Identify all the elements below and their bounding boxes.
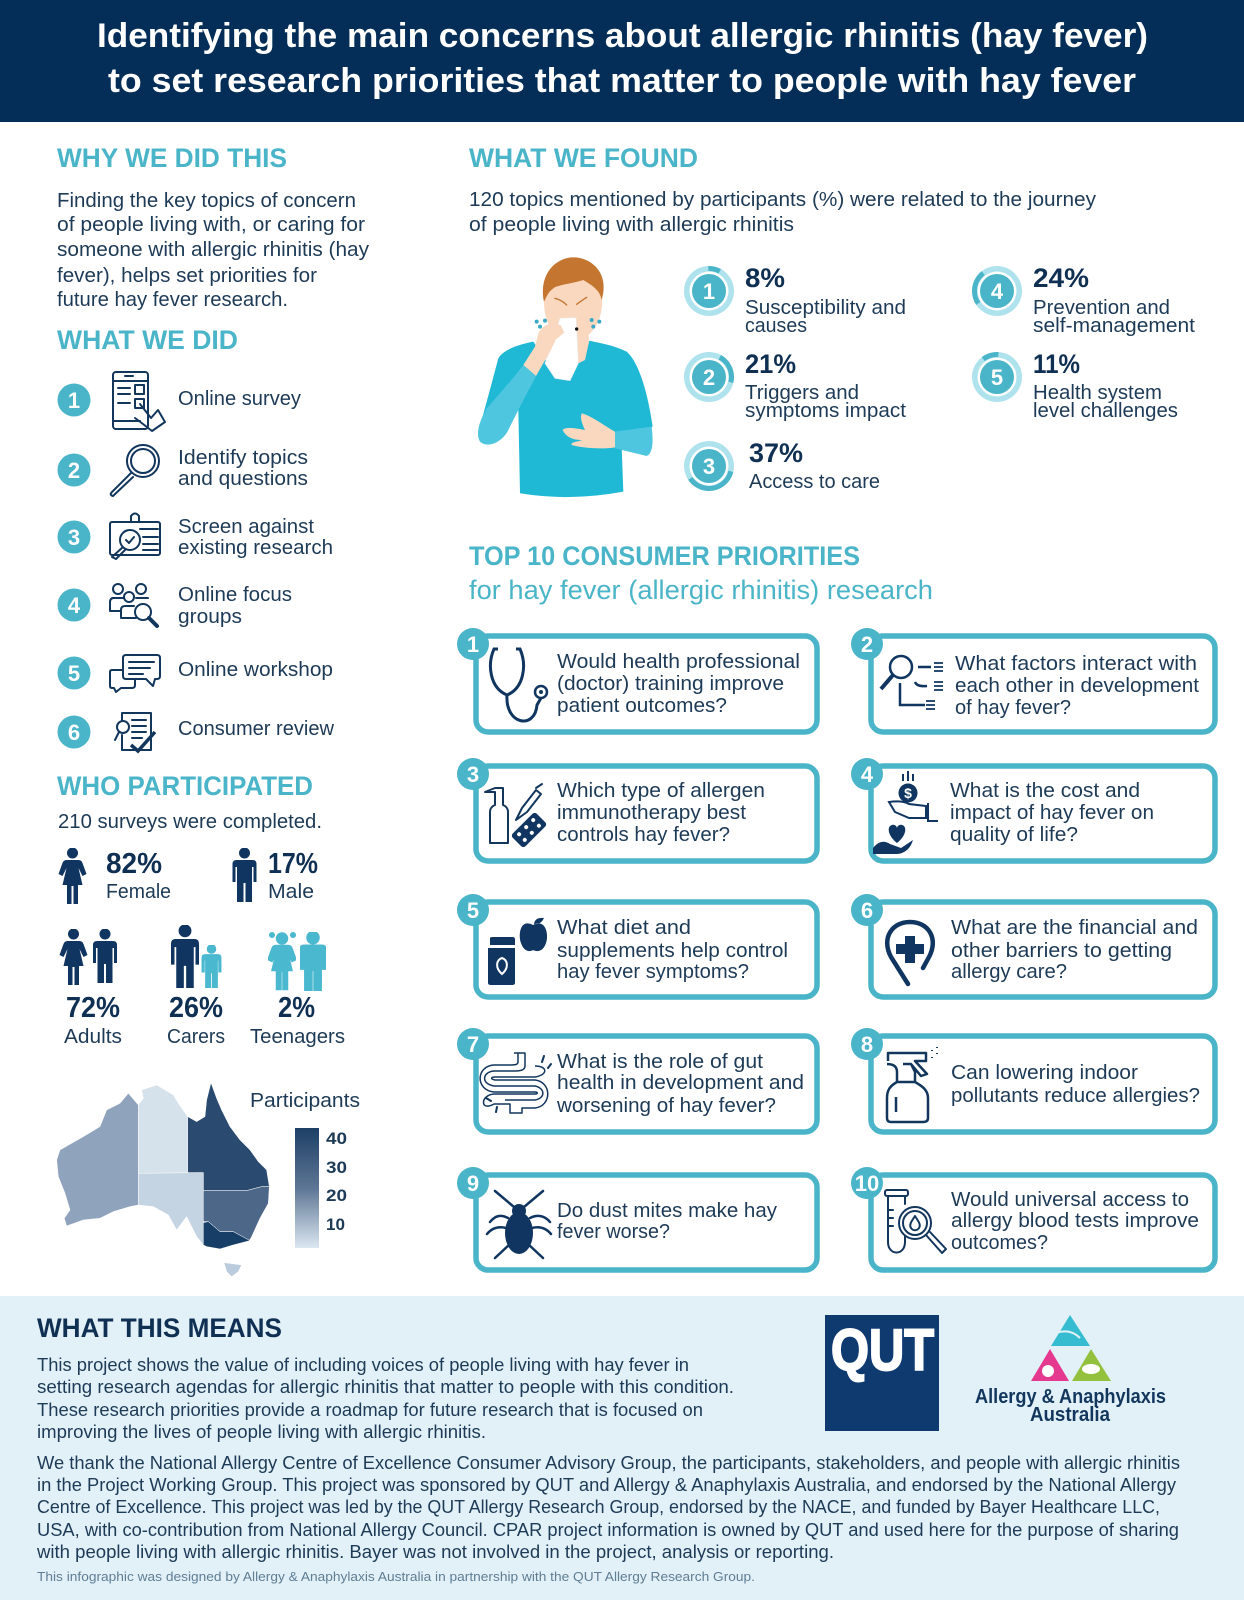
panel: priority 6: 6	[861, 898, 873, 923]
stat: female	[58, 848, 171, 904]
chart: journey topic percentages	[684, 263, 1195, 493]
panel: priority 2	[851, 628, 1215, 732]
panel: priority 1	[457, 628, 817, 732]
text block: what we found: 120 topics mentioned by participants (%) were related to the journey	[469, 189, 1096, 211]
heading: top 10 consumer priorities	[469, 541, 933, 605]
panel: priority 1: patient outcomes?	[557, 694, 727, 717]
topic 3: Access to care	[749, 471, 880, 493]
text block: acknowledgements: We thank the National Allergy Centre of Excellence Consumer Advisory Group, the participants, stakeholders, and people with allergic rhinitis	[37, 1453, 1180, 1473]
text block: why we did this: future hay fever research.	[57, 289, 288, 311]
panel: priority 10: Would universal access to	[951, 1188, 1189, 1211]
topic 5: level challenges	[1033, 400, 1178, 422]
panel: priority 9: Do dust mites make hay	[557, 1199, 778, 1222]
step 1: online survey: Online survey	[178, 388, 301, 410]
panel: priority 9: 9	[467, 1171, 479, 1196]
topic 3: 37%	[749, 438, 803, 468]
text block: acknowledgements: Centre of Excellence. This project was led by the QUT Allergy Research Group, endorsed by the NACE, and funded by Bayer Healthcare LLC,	[37, 1497, 1160, 1517]
stat: teenagers: Teenagers	[250, 1026, 345, 1048]
map legend: participants	[250, 1090, 360, 1248]
step 5: online workshop	[58, 655, 333, 692]
heading: what this means: WHAT THIS MEANS	[37, 1313, 282, 1343]
topic 1	[684, 263, 906, 337]
topic 4: Prevention and	[1033, 297, 1170, 319]
step 4: focus groups: Online focus	[178, 584, 292, 606]
text block: implications: These research priorities provide a roadmap for future research that is focused on	[37, 1400, 703, 1420]
panel: priority 4	[851, 758, 1215, 861]
map legend: participants: 40	[326, 1129, 347, 1148]
step 4: focus groups: groups	[178, 606, 242, 628]
topic 1: causes	[745, 315, 807, 337]
panel: priority 9	[457, 1167, 817, 1270]
topic 4: 4	[991, 279, 1004, 304]
panel: priority 1: 1	[467, 632, 479, 657]
panel: priority 3: 3	[467, 762, 479, 787]
panel: priority 4: $	[904, 785, 912, 801]
step 5: online workshop: Online workshop	[178, 659, 333, 681]
panel: priority 7	[457, 1028, 817, 1132]
panel: priority 7: worsening of hay fever?	[556, 1094, 776, 1117]
text block: acknowledgements	[36, 1453, 1180, 1562]
panel: priority 8: Can lowering indoor	[951, 1061, 1138, 1084]
step 6: consumer review: Consumer review	[178, 718, 335, 740]
panel: priority 4: impact of hay fever on	[950, 801, 1154, 824]
map legend: participants: Participants	[250, 1090, 360, 1112]
heading: top 10 consumer priorities: for hay fever (allergic rhinitis) research	[469, 575, 933, 605]
stat: teenagers	[250, 932, 345, 1048]
topic 5	[972, 349, 1178, 422]
text block: implications: setting research agendas for allergic rhinitis that matter to people with this condition.	[37, 1377, 734, 1397]
title banner	[0, 0, 1244, 122]
text block: acknowledgements: USA, with co-contribution from National Allergy Council. CPAR project information is owned by QUT and used here for the purpose of sharing	[37, 1520, 1179, 1540]
map legend: participants: 10	[326, 1215, 345, 1234]
topic 4: self-management	[1033, 315, 1195, 337]
panel: priority 5: 5	[467, 898, 479, 923]
panel: priority 3	[457, 758, 817, 861]
panel: priority 10: outcomes?	[951, 1231, 1048, 1254]
panel: priority 3: Which type of allergen	[557, 779, 765, 802]
stat: female: 82%	[106, 848, 162, 880]
text block: why we did this	[57, 190, 369, 311]
heading: who participated: WHO PARTICIPATED	[57, 771, 313, 801]
text: surveys completed: 210 surveys were completed.	[58, 811, 322, 833]
logo: QUT: QUT	[831, 1318, 934, 1383]
stat: female: Female	[106, 881, 171, 903]
panel: priority 2: What factors interact with	[955, 652, 1197, 675]
logo: Allergy & Anaphylaxis Australia	[975, 1315, 1166, 1426]
topic 5: 5	[991, 365, 1003, 390]
stat: male: 17%	[268, 848, 318, 880]
panel: priority 7: 7	[467, 1032, 479, 1057]
text block: why we did this: someone with allergic rhinitis (hay	[57, 239, 369, 261]
panel: priority 8	[851, 1028, 1215, 1132]
stat: teenagers: 2%	[278, 992, 315, 1024]
panel: priority 6: What are the financial and	[951, 916, 1198, 939]
step 4: focus groups: 4	[68, 593, 81, 618]
step 3: screen against research: Screen against	[178, 516, 314, 538]
text block: implications	[37, 1355, 734, 1442]
text block: why we did this: Finding the key topics of concern	[57, 190, 356, 212]
title banner: to set research priorities that matter to people with hay fever	[108, 62, 1136, 100]
logo: QUT	[825, 1315, 939, 1431]
step 2: identify topics: and questions	[178, 468, 308, 490]
logo: Allergy & Anaphylaxis Australia: Allergy & Anaphylaxis	[975, 1386, 1166, 1408]
text block: why we did this: fever), helps set priorities for	[57, 265, 317, 287]
map: participants by state	[57, 1083, 269, 1277]
panel: priority 5: hay fever symptoms?	[557, 960, 749, 983]
text block: implications: improving the lives of people living with allergic rhinitis.	[37, 1422, 486, 1442]
topic 1: Susceptibility and	[745, 297, 906, 319]
panel: priority 10: allergy blood tests improve	[951, 1209, 1199, 1232]
topic 4: 24%	[1033, 263, 1089, 293]
stat: male	[232, 848, 318, 903]
stat: adults: Adults	[64, 1026, 122, 1048]
panel: priority 7: What is the role of gut	[557, 1050, 763, 1073]
illustration: person sneezing into tissue	[478, 257, 653, 497]
panel: what we did steps	[58, 372, 335, 751]
step 6: consumer review: 6	[68, 720, 80, 745]
topic 2: Triggers and	[745, 382, 859, 404]
step 6: consumer review	[58, 713, 335, 751]
topic 1: 1	[703, 279, 715, 304]
panel: what this means	[0, 1296, 1244, 1600]
topic 3	[684, 438, 880, 493]
heading: what we found: WHAT WE FOUND	[469, 143, 698, 173]
text block: what we found	[469, 189, 1096, 236]
panel: priority 7: health in development and	[557, 1071, 804, 1094]
panel: priority 5: What diet and	[557, 916, 691, 939]
text block: acknowledgements: in the Project Working Group. This project was sponsored by QUT and Allergy & Anaphylaxis Australia, and endorsed by the National Allergy	[37, 1475, 1176, 1495]
panel: priority 5: supplements help control	[557, 939, 788, 962]
title banner: Identifying the main concerns about allergic rhinitis (hay fever)	[97, 17, 1148, 55]
step 2: identify topics: 2	[68, 458, 80, 483]
stat: male: Male	[268, 881, 314, 903]
panel: priority 4: 4	[861, 762, 874, 787]
footer credit: This infographic was designed by Allergy & Anaphylaxis Australia in partnership with the QUT Allergy Research Group.	[37, 1569, 755, 1584]
topic 2: 21%	[745, 349, 796, 379]
topic 1: 8%	[745, 263, 785, 293]
stat: carers: 26%	[169, 992, 223, 1024]
panel: priority 1: (doctor) training improve	[557, 672, 784, 695]
text block: why we did this: of people living with, or caring for	[57, 214, 365, 236]
step 5: online workshop: 5	[68, 661, 80, 686]
text block: acknowledgements: with people living with allergic rhinitis. Bayer was not involved in the project, analysis or reporting.	[36, 1542, 834, 1562]
step 2: identify topics	[58, 445, 308, 496]
step 2: identify topics: Identify topics	[178, 447, 308, 469]
heading: why we did this: WHY WE DID THIS	[57, 143, 287, 173]
heading: what we did: WHAT WE DID	[57, 325, 238, 355]
stat: carers: Carers	[167, 1026, 225, 1048]
panel: priority 10	[851, 1167, 1215, 1270]
panel: priority 9: fever worse?	[557, 1220, 670, 1243]
stat: adults: 72%	[66, 992, 120, 1024]
panel: priority 8: pollutants reduce allergies?	[951, 1084, 1200, 1107]
panel: priority 6	[851, 894, 1215, 997]
panel: priority 4: What is the cost and	[950, 779, 1140, 802]
panel: priority 6: allergy care?	[951, 960, 1067, 983]
stat: carers	[167, 924, 225, 1048]
text block: implications: This project shows the value of including voices of people living with hay fever in	[37, 1355, 689, 1375]
step 3: screen against research: existing research	[178, 537, 333, 559]
panel: priority 1: Would health professional	[557, 650, 800, 673]
topic 2	[684, 349, 906, 422]
topic 2: symptoms impact	[745, 400, 906, 422]
panel: priority 2: 2	[861, 632, 873, 657]
text block: what we found: of people living with allergic rhinitis	[469, 214, 794, 236]
stat: adults	[60, 928, 122, 1048]
map legend: participants: 30	[326, 1158, 347, 1177]
panel: priority 10: 10	[855, 1171, 879, 1196]
panel: priority 2: of hay fever?	[955, 696, 1071, 719]
map legend: participants: 20	[326, 1186, 347, 1205]
panel: priority 5	[457, 894, 817, 997]
heading: top 10 consumer priorities: TOP 10 CONSUMER PRIORITIES	[469, 541, 860, 571]
panel: priority 3: immunotherapy best	[557, 801, 746, 824]
panel: priority 6: other barriers to getting	[951, 939, 1172, 962]
topic 5: Health system	[1033, 382, 1162, 404]
panel: priority 4: quality of life?	[950, 823, 1078, 846]
step 3: screen against research	[58, 514, 333, 559]
step 1: online survey: 1	[68, 388, 80, 413]
topic 5: 11%	[1033, 349, 1080, 379]
topic 3: 3	[703, 454, 715, 479]
step 4: focus groups	[58, 584, 292, 628]
logo: Allergy & Anaphylaxis Australia: Australia	[1030, 1404, 1111, 1426]
panel: priority 2: each other in development	[955, 674, 1199, 697]
topic 2: 2	[703, 365, 715, 390]
step 3: screen against research: 3	[68, 525, 80, 550]
panel: priority 3: controls hay fever?	[557, 823, 730, 846]
step 1: online survey	[58, 372, 301, 431]
topic 4	[972, 263, 1195, 337]
panel: priority 8: 8	[861, 1032, 873, 1057]
